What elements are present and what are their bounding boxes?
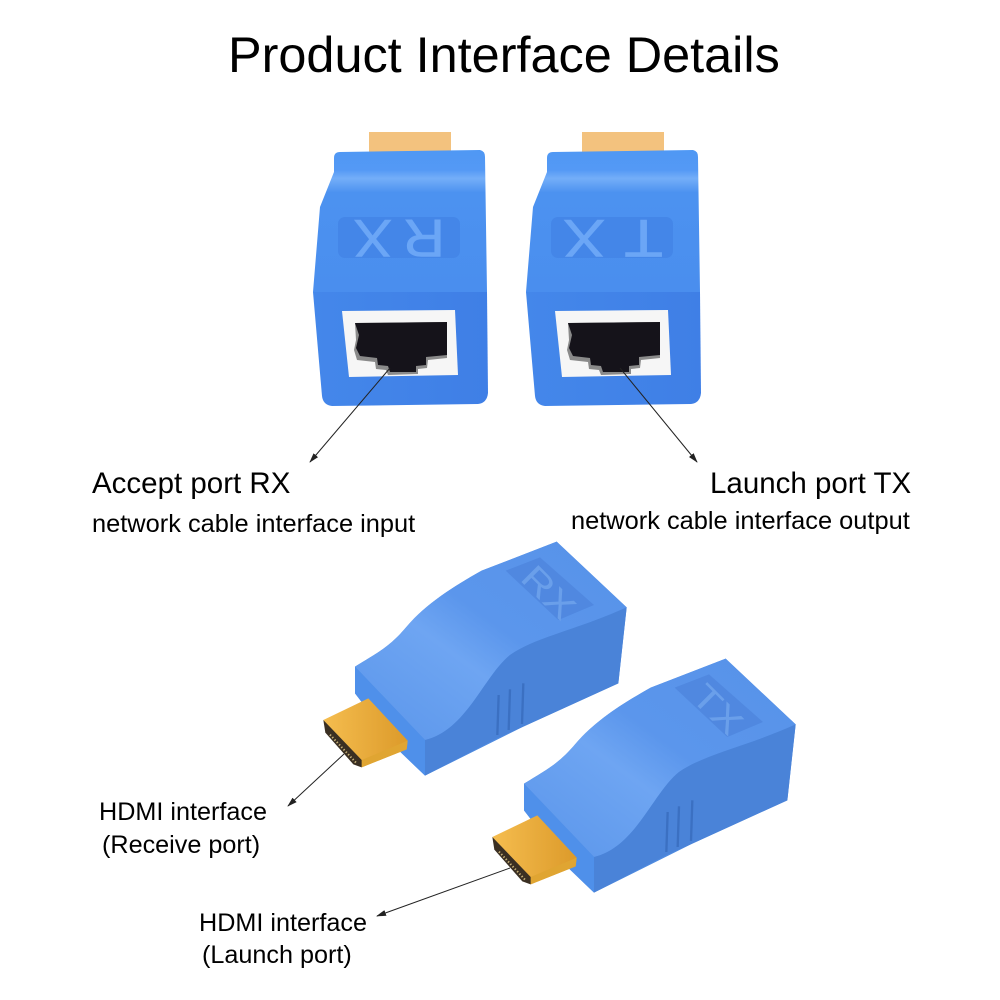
connector: TX HDMI view: [492, 659, 796, 893]
label: accept port RX: Accept port RX: [92, 467, 290, 500]
TX label plate: TX: [684, 676, 751, 743]
connector: TX top view: [526, 132, 701, 406]
text: input description: network cable interface input: [92, 510, 415, 538]
arrow: HDMI receive: [288, 754, 344, 806]
label: HDMI launch port: HDMI interface: [199, 909, 367, 937]
connector: RX HDMI view: [323, 542, 627, 776]
label: HDMI receive port: HDMI interface: [99, 798, 267, 826]
title: Product Interface Details: [228, 26, 780, 83]
arrow: TX port: [620, 368, 697, 462]
connector: RX top view: [313, 132, 488, 406]
text: output description: network cable interface output: [571, 507, 910, 535]
arrow: RX port: [310, 368, 390, 462]
RX label plate: RX: [513, 558, 583, 628]
TX network port: [555, 310, 671, 377]
RX plate: RX: [353, 209, 445, 268]
label: HDMI launch port: [199, 909, 367, 969]
label: HDMI launch port: (Launch port): [202, 941, 352, 969]
TX plate: TX: [563, 208, 663, 267]
arrow: HDMI launch: [377, 868, 510, 916]
label: HDMI receive port: [99, 798, 267, 859]
label: HDMI receive port: (Receive port): [102, 831, 260, 859]
RX network port: [342, 310, 458, 377]
label: launch port TX: Launch port TX: [710, 467, 911, 500]
